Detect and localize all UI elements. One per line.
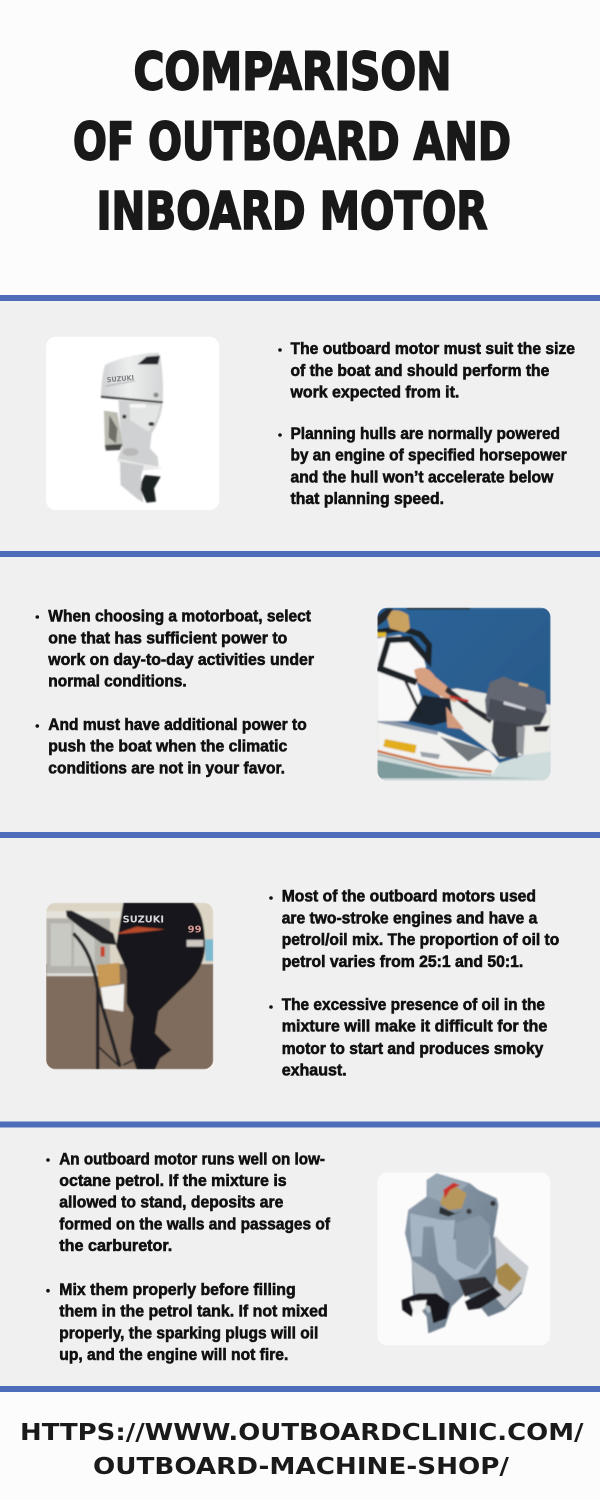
- bullet text: mixing petrol and oil: allowed to stand, deposits are: [59, 1193, 283, 1212]
- photo: man steering inflatable boat with Yamaha motor: [377, 608, 551, 781]
- bullet text: two-stroke engines: mixture will make it difficult for the: [282, 1017, 547, 1036]
- bullet text: two-stroke engines: are two-stroke engines and have a: [282, 908, 538, 927]
- photo: black Suzuki outboard on a stand: SUZUKI: [123, 914, 164, 925]
- photo: white Suzuki outboard motor: [46, 337, 219, 510]
- bullet text: outboard motor sizing: by an engine of specified horsepower: [290, 446, 567, 465]
- bullet text: mixing petrol and oil: them in the petrol tank. If not mixed: [59, 1302, 328, 1321]
- photo: black Suzuki outboard on a stand: 99: [188, 925, 202, 936]
- panel: choosing a motorboat: [36, 607, 551, 781]
- bullet text: outboard motor sizing: [278, 339, 575, 508]
- bullet text: mixing petrol and oil: up, and the engine will not fire.: [59, 1345, 288, 1364]
- title: [73, 42, 511, 242]
- footer URL: [20, 1418, 584, 1480]
- bullet text: choosing a motorboat: [36, 607, 314, 777]
- bullet text: outboard motor sizing: and the hull won’t accelerate below: [290, 467, 554, 486]
- photo: carburetor on white: [377, 1172, 550, 1345]
- bullet text: mixing petrol and oil: [46, 1149, 330, 1364]
- panel: outboard motor sizing: [46, 337, 575, 510]
- footer URL: OUTBOARD-MACHINE-SHOP/: [93, 1452, 509, 1480]
- bullet text: two-stroke engines: motor to start and produces smoky: [282, 1039, 544, 1058]
- bullet text: mixing petrol and oil: Mix them properly before filling: [59, 1280, 296, 1299]
- bullet text: outboard motor sizing: work expected from it.: [290, 383, 459, 402]
- bullet text: choosing a motorboat: push the boat when the climatic: [48, 737, 287, 756]
- bullet text: two-stroke engines: The excessive presence of oil in the: [282, 995, 545, 1014]
- photo: black Suzuki outboard on a stand: [46, 903, 213, 1069]
- bullet text: two-stroke engines: exhaust.: [282, 1061, 347, 1080]
- photo: white Suzuki outboard motor: SUZUKI: [106, 374, 134, 384]
- bullet text: choosing a motorboat: normal conditions.: [48, 672, 187, 691]
- bullet text: outboard motor sizing: of the boat and should perform the: [290, 361, 549, 380]
- bullet text: mixing petrol and oil: formed on the walls and passages of: [59, 1214, 330, 1233]
- bullet text: choosing a motorboat: one that has sufficient power to: [48, 628, 287, 647]
- bullet text: two-stroke engines: [270, 887, 559, 1080]
- bullet text: outboard motor sizing: Planning hulls are normally powered: [290, 424, 560, 443]
- bullet text: choosing a motorboat: And must have additional power to: [48, 715, 307, 734]
- title: INBOARD MOTOR: [96, 182, 488, 242]
- bullet text: mixing petrol and oil: An outboard motor runs well on low-: [59, 1149, 325, 1168]
- bullet text: choosing a motorboat: When choosing a motorboat, select: [48, 607, 311, 626]
- bullet text: two-stroke engines: petrol varies from 25:1 and 50:1.: [282, 952, 523, 971]
- bullet text: outboard motor sizing: that planning speed.: [290, 489, 444, 508]
- bullet text: two-stroke engines: petrol/oil mix. The proportion of oil to: [282, 930, 559, 949]
- panel: mixing petrol and oil: [46, 1149, 550, 1364]
- bullet text: choosing a motorboat: work on day-to-day activities under: [47, 650, 314, 669]
- footer URL: HTTPS://WWW.OUTBOARDCLINIC.COM/: [20, 1418, 584, 1446]
- bullet text: two-stroke engines: Most of the outboard motors used: [282, 887, 536, 906]
- bullet text: mixing petrol and oil: properly, the sparking plugs will oil: [59, 1323, 318, 1342]
- title: COMPARISON: [134, 42, 452, 102]
- bullet text: outboard motor sizing: The outboard motor must suit the size: [290, 339, 575, 358]
- bullet text: mixing petrol and oil: the carburetor.: [59, 1236, 172, 1255]
- bullet text: choosing a motorboat: conditions are not in your favor.: [48, 758, 285, 777]
- bullet text: mixing petrol and oil: octane petrol. If the mixture is: [59, 1171, 287, 1190]
- panel: two-stroke engines: [46, 887, 559, 1080]
